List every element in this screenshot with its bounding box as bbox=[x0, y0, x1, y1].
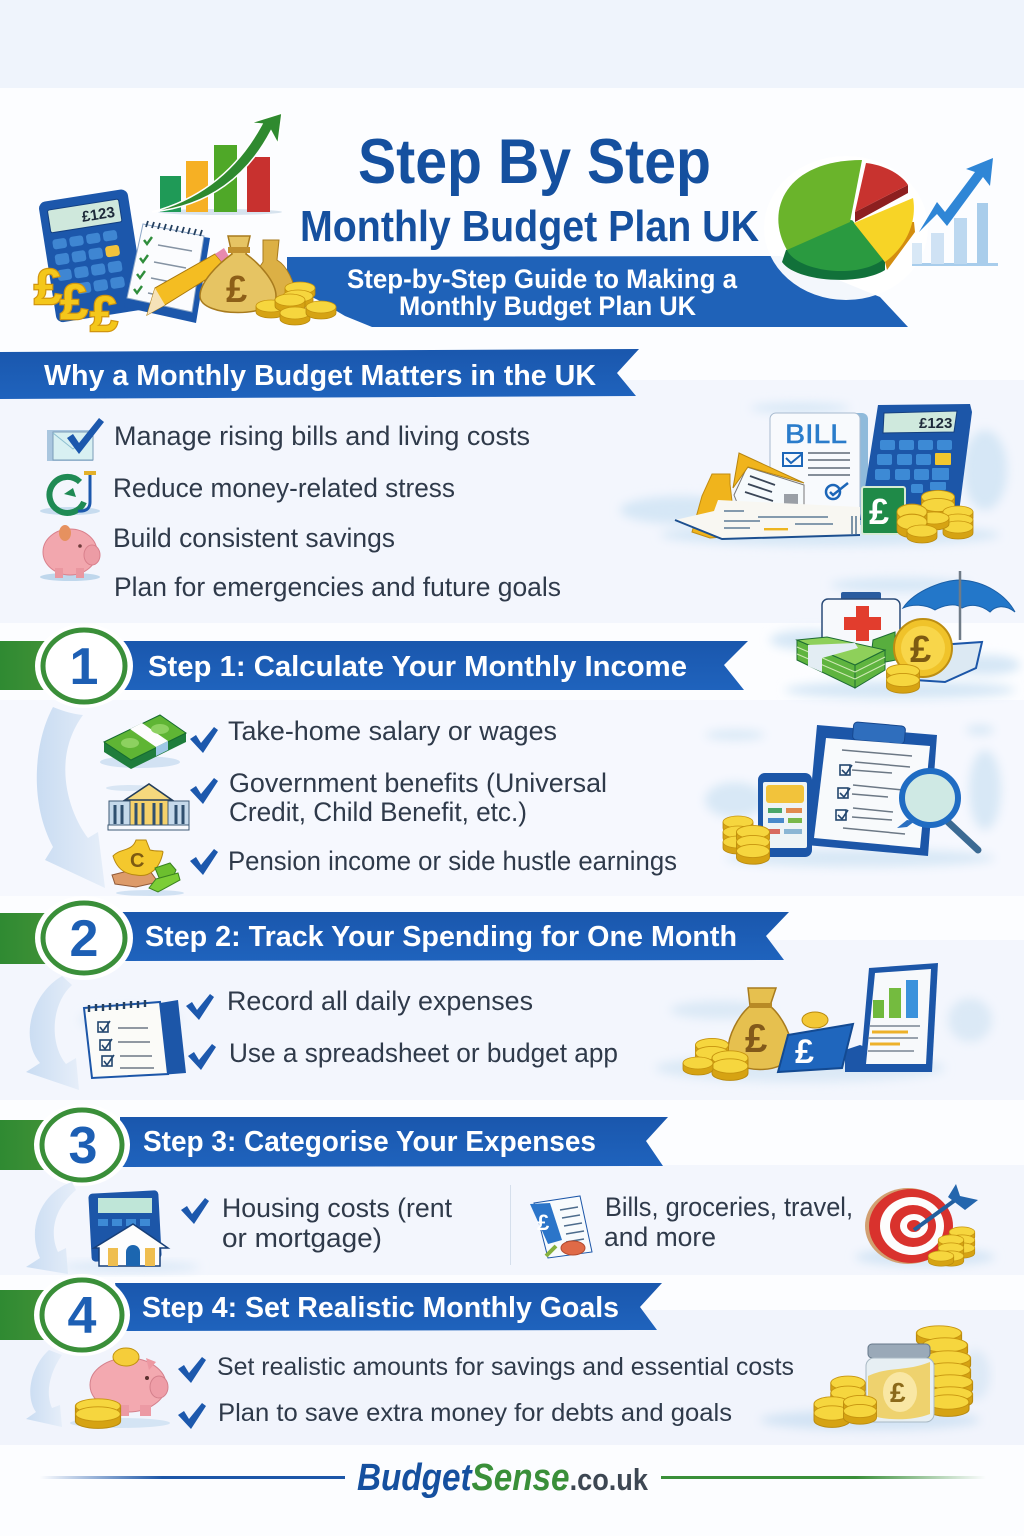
icon: bills document: £ bbox=[537, 1210, 550, 1235]
step 3 banner bbox=[0, 1104, 668, 1186]
icon: bills document bbox=[530, 1196, 592, 1258]
tick bbox=[178, 1357, 206, 1383]
icon: gold ingot bbox=[112, 840, 184, 896]
arrow: flow down bbox=[26, 1350, 62, 1427]
icon: banknotes bbox=[100, 715, 186, 769]
tick bbox=[178, 1403, 206, 1429]
text: government benefits: Credit, Child Benefit, etc.) bbox=[229, 797, 527, 827]
illustration: clipboard, phone, magnifier bbox=[705, 722, 1001, 867]
icon: pie chart bbox=[764, 156, 928, 300]
green note bbox=[862, 487, 905, 534]
step 4 banner: 4 bbox=[68, 1287, 97, 1345]
tick bbox=[186, 994, 214, 1020]
step 3 banner: Step 3: Categorise Your Expenses bbox=[143, 1126, 596, 1158]
arrow: flow down bbox=[26, 1182, 76, 1274]
illustration: emergency fund kit, umbrella, money bbox=[770, 571, 1020, 699]
icon: green arrow loop bbox=[40, 471, 100, 515]
icon: target and coins bbox=[855, 1184, 995, 1266]
icon: notepad and pencil bbox=[124, 221, 232, 323]
ticket bbox=[675, 500, 860, 539]
subtitle text: Monthly Budget Plan UK bbox=[399, 291, 696, 321]
panel: step 3 content bbox=[26, 1182, 995, 1274]
icon: gold pound symbols: £ bbox=[60, 274, 88, 330]
illustration: emergency fund kit, umbrella, money: £ bbox=[910, 629, 931, 671]
step 2 banner: 2 bbox=[70, 910, 98, 968]
icon: blue trend bars and arrow bbox=[912, 158, 998, 266]
tick bbox=[190, 727, 218, 753]
title: Step By Step bbox=[358, 127, 711, 197]
icon: gold pound symbols bbox=[34, 259, 118, 342]
title bbox=[300, 127, 759, 251]
step 2 banner bbox=[0, 896, 789, 980]
text: take-home: Take-home salary or wages bbox=[228, 716, 557, 746]
calculator: £123 bbox=[919, 415, 952, 432]
icon: growth bar chart with arrow bbox=[152, 113, 282, 215]
text: pension: Pension income or side hustle earnings bbox=[228, 846, 677, 876]
tick bbox=[181, 1198, 209, 1224]
arrow: flow down bbox=[26, 976, 79, 1090]
banner: why a monthly budget matters: Why a Monthly Budget Matters in the UK bbox=[44, 360, 596, 392]
panel: step 1 content bbox=[37, 707, 677, 896]
text: housing costs: or mortgage) bbox=[222, 1223, 382, 1253]
text: housing costs bbox=[222, 1193, 452, 1253]
illustration: money bag, wallet, tablet: £ bbox=[745, 1017, 767, 1061]
text: bullet 4: Plan for emergencies and future goals bbox=[114, 572, 561, 602]
icon: piggy bank with coins bbox=[70, 1348, 170, 1428]
bag and envelope bbox=[692, 474, 736, 538]
text: government benefits: Government benefits (Universal bbox=[229, 768, 607, 798]
icon: piggy bank bbox=[40, 525, 100, 581]
illustration: bill and calculator: £ bbox=[869, 491, 889, 532]
illustration: money bag, wallet, tablet: £ bbox=[795, 1033, 814, 1071]
step 1 banner bbox=[0, 624, 748, 708]
tick bbox=[188, 1044, 216, 1070]
icon: calculator: £123 bbox=[81, 204, 116, 226]
step 4 banner: Step 4: Set Realistic Monthly Goals bbox=[142, 1292, 619, 1324]
coins bbox=[922, 490, 954, 510]
icon: gold pound symbols: £ bbox=[90, 286, 118, 342]
divider bbox=[510, 1185, 511, 1265]
panel: step 4 content bbox=[26, 1348, 794, 1429]
step 2 banner: Step 2: Track Your Spending for One Month bbox=[145, 921, 737, 953]
tick bbox=[190, 778, 218, 804]
illustration: savings jar and coin stacks bbox=[760, 1326, 990, 1430]
text: plan to save: Plan to save extra money for debts and goals bbox=[218, 1399, 732, 1427]
icon: gold ingot: C bbox=[130, 850, 144, 872]
hero: subtitle ribbon bbox=[287, 256, 908, 327]
icon: check mark card bbox=[47, 418, 104, 461]
text: set realistic amounts: Set realistic amounts for savings and essential costs bbox=[217, 1353, 794, 1381]
footer: brand bbox=[40, 1457, 986, 1499]
icon: money bags and coins bbox=[200, 236, 336, 325]
text: bills: and more bbox=[604, 1222, 716, 1252]
icon: calculator and house bbox=[60, 1190, 200, 1272]
calculator bbox=[860, 404, 972, 520]
panel: step 2 content bbox=[26, 976, 618, 1090]
text: bills bbox=[604, 1192, 853, 1252]
text: record: Record all daily expenses bbox=[227, 986, 533, 1016]
step 3 banner: 3 bbox=[69, 1117, 97, 1175]
text: use a spreadsheet: Use a spreadsheet or budget app bbox=[229, 1038, 618, 1068]
icon: calculator bbox=[38, 189, 146, 323]
illustration: money bag, wallet, tablet bbox=[655, 963, 992, 1082]
subtitle text bbox=[347, 264, 738, 321]
text: bullet 1: Manage rising bills and living costs bbox=[114, 421, 530, 451]
text: housing costs: Housing costs (rent bbox=[222, 1193, 452, 1223]
icon: bank building bbox=[106, 784, 189, 830]
illustration: bill and calculator bbox=[620, 403, 1007, 546]
title: Monthly Budget Plan UK bbox=[300, 202, 759, 251]
banner: why a monthly budget matters bbox=[0, 349, 639, 399]
panel: why list bbox=[40, 418, 561, 602]
step 1 banner: Step 1: Calculate Your Monthly Income bbox=[148, 651, 687, 683]
icon: money bags and coins: £ bbox=[226, 269, 247, 311]
step 1 banner: 1 bbox=[70, 638, 98, 696]
tick bbox=[190, 849, 218, 875]
footer: brand: BudgetSense.co.uk bbox=[357, 1457, 649, 1499]
text: bills: Bills, groceries, travel, bbox=[605, 1192, 853, 1222]
icon: notebook bbox=[80, 1000, 186, 1078]
illustration: bill and calculator: BILL bbox=[785, 419, 847, 449]
text: bullet 3: Build consistent savings bbox=[113, 523, 395, 553]
text: government benefits bbox=[229, 768, 607, 827]
step 4 banner bbox=[0, 1274, 662, 1356]
arrow: flow down bbox=[37, 707, 105, 888]
illustration: savings jar and coin stacks: £ bbox=[890, 1377, 906, 1408]
subtitle text: Step-by-Step Guide to Making a bbox=[347, 264, 738, 294]
icon: gold pound symbols: £ bbox=[34, 259, 62, 315]
text: bullet 2: Reduce money-related stress bbox=[113, 473, 455, 503]
